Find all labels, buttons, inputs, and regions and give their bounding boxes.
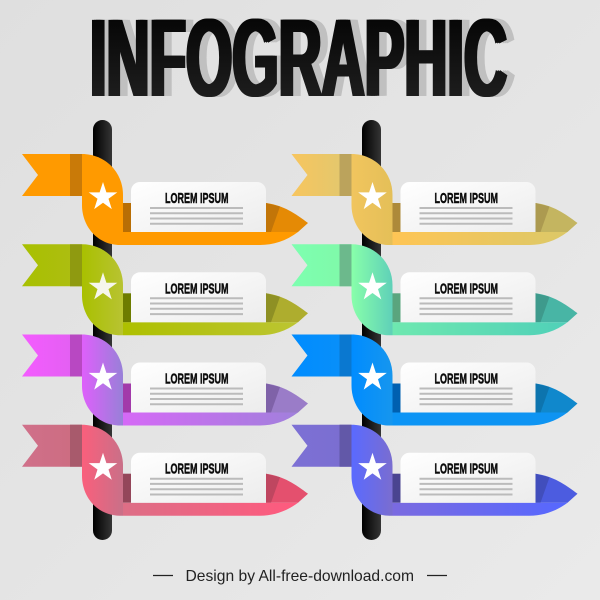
star icon <box>358 453 387 480</box>
star icon <box>89 453 117 480</box>
card heading: LOREM IPSUM <box>434 372 498 388</box>
card <box>400 362 536 412</box>
bottom band <box>392 232 568 245</box>
flag fold <box>70 334 82 376</box>
card <box>131 182 266 232</box>
flag fold <box>340 334 352 376</box>
ribbon: red <box>22 425 308 516</box>
bottom band <box>123 322 298 335</box>
curved body <box>352 244 392 335</box>
arrow tip <box>536 293 578 322</box>
card <box>400 272 536 322</box>
tip fold <box>536 474 550 503</box>
card heading: LOREM IPSUM <box>165 462 229 478</box>
left vertical bar <box>93 120 112 540</box>
arrow tip <box>266 203 308 232</box>
curved body <box>82 244 123 335</box>
curved body <box>352 334 392 426</box>
ribbon: purple <box>292 425 578 516</box>
card <box>131 272 266 322</box>
star icon <box>358 272 387 299</box>
curved body <box>352 425 392 516</box>
back fold <box>392 203 400 232</box>
card text lines <box>150 208 243 224</box>
card <box>400 453 536 503</box>
star icon <box>358 362 387 390</box>
card text lines <box>420 479 512 494</box>
ribbon: orange <box>22 154 308 245</box>
arrow tip <box>536 474 578 503</box>
back fold <box>392 293 400 322</box>
tip fold <box>266 384 280 412</box>
flag fold <box>70 425 82 467</box>
arrow tip <box>266 474 308 503</box>
star icon <box>89 272 117 299</box>
flag fold <box>340 244 352 286</box>
star icon <box>358 182 387 209</box>
back fold <box>392 474 400 503</box>
bottom band <box>392 322 568 335</box>
back fold <box>392 384 400 412</box>
flag fold <box>70 154 82 196</box>
star icon <box>89 362 117 390</box>
flag fold <box>340 154 352 196</box>
bottom band <box>392 503 568 516</box>
flag <box>292 244 352 286</box>
card text lines <box>150 479 243 494</box>
flag <box>292 425 352 467</box>
card <box>400 182 536 232</box>
card text lines <box>420 298 512 314</box>
card heading: LOREM IPSUM <box>165 372 229 388</box>
back fold <box>123 384 131 412</box>
tip fold <box>266 203 280 232</box>
flag fold <box>340 425 352 467</box>
card <box>131 362 266 412</box>
card heading: LOREM IPSUM <box>434 191 498 207</box>
ribbon: blue <box>292 334 578 426</box>
tip fold <box>266 474 280 503</box>
arrow tip <box>536 203 578 232</box>
arrow tip <box>536 384 578 412</box>
ribbon: green <box>292 244 578 335</box>
back fold <box>123 293 131 322</box>
curved body <box>82 154 123 245</box>
card heading: LOREM IPSUM <box>165 281 229 297</box>
card heading: LOREM IPSUM <box>434 462 498 478</box>
flag fold <box>70 244 82 286</box>
tip fold <box>536 293 550 322</box>
tip fold <box>536 384 550 412</box>
bottom band <box>123 232 298 245</box>
card text lines <box>150 298 243 314</box>
card text lines <box>150 388 243 404</box>
curved body <box>82 425 123 516</box>
flag <box>292 154 352 196</box>
ribbon: magenta <box>22 334 308 426</box>
card text lines <box>420 388 512 404</box>
card heading: LOREM IPSUM <box>165 191 229 207</box>
star icon <box>89 182 117 209</box>
tip fold <box>536 203 550 232</box>
bottom band <box>392 412 568 426</box>
ribbon: yellow <box>292 154 578 245</box>
arrow tip <box>266 384 308 412</box>
ribbon: olive <box>22 244 308 335</box>
arrow tip <box>266 293 308 322</box>
flag <box>22 244 82 286</box>
flag <box>22 334 82 376</box>
tip fold <box>266 293 280 322</box>
back fold <box>123 474 131 503</box>
flag <box>22 425 82 467</box>
curved body <box>352 154 392 245</box>
bottom band <box>123 412 298 426</box>
curved body <box>82 334 123 426</box>
footer credit: Design by All-free-download.com <box>186 568 414 585</box>
flag <box>292 334 352 376</box>
back fold <box>123 203 131 232</box>
bottom band <box>123 503 298 516</box>
flag <box>22 154 82 196</box>
card text lines <box>420 208 512 224</box>
right vertical bar <box>362 120 381 540</box>
card heading: LOREM IPSUM <box>434 281 498 297</box>
card <box>131 453 266 503</box>
